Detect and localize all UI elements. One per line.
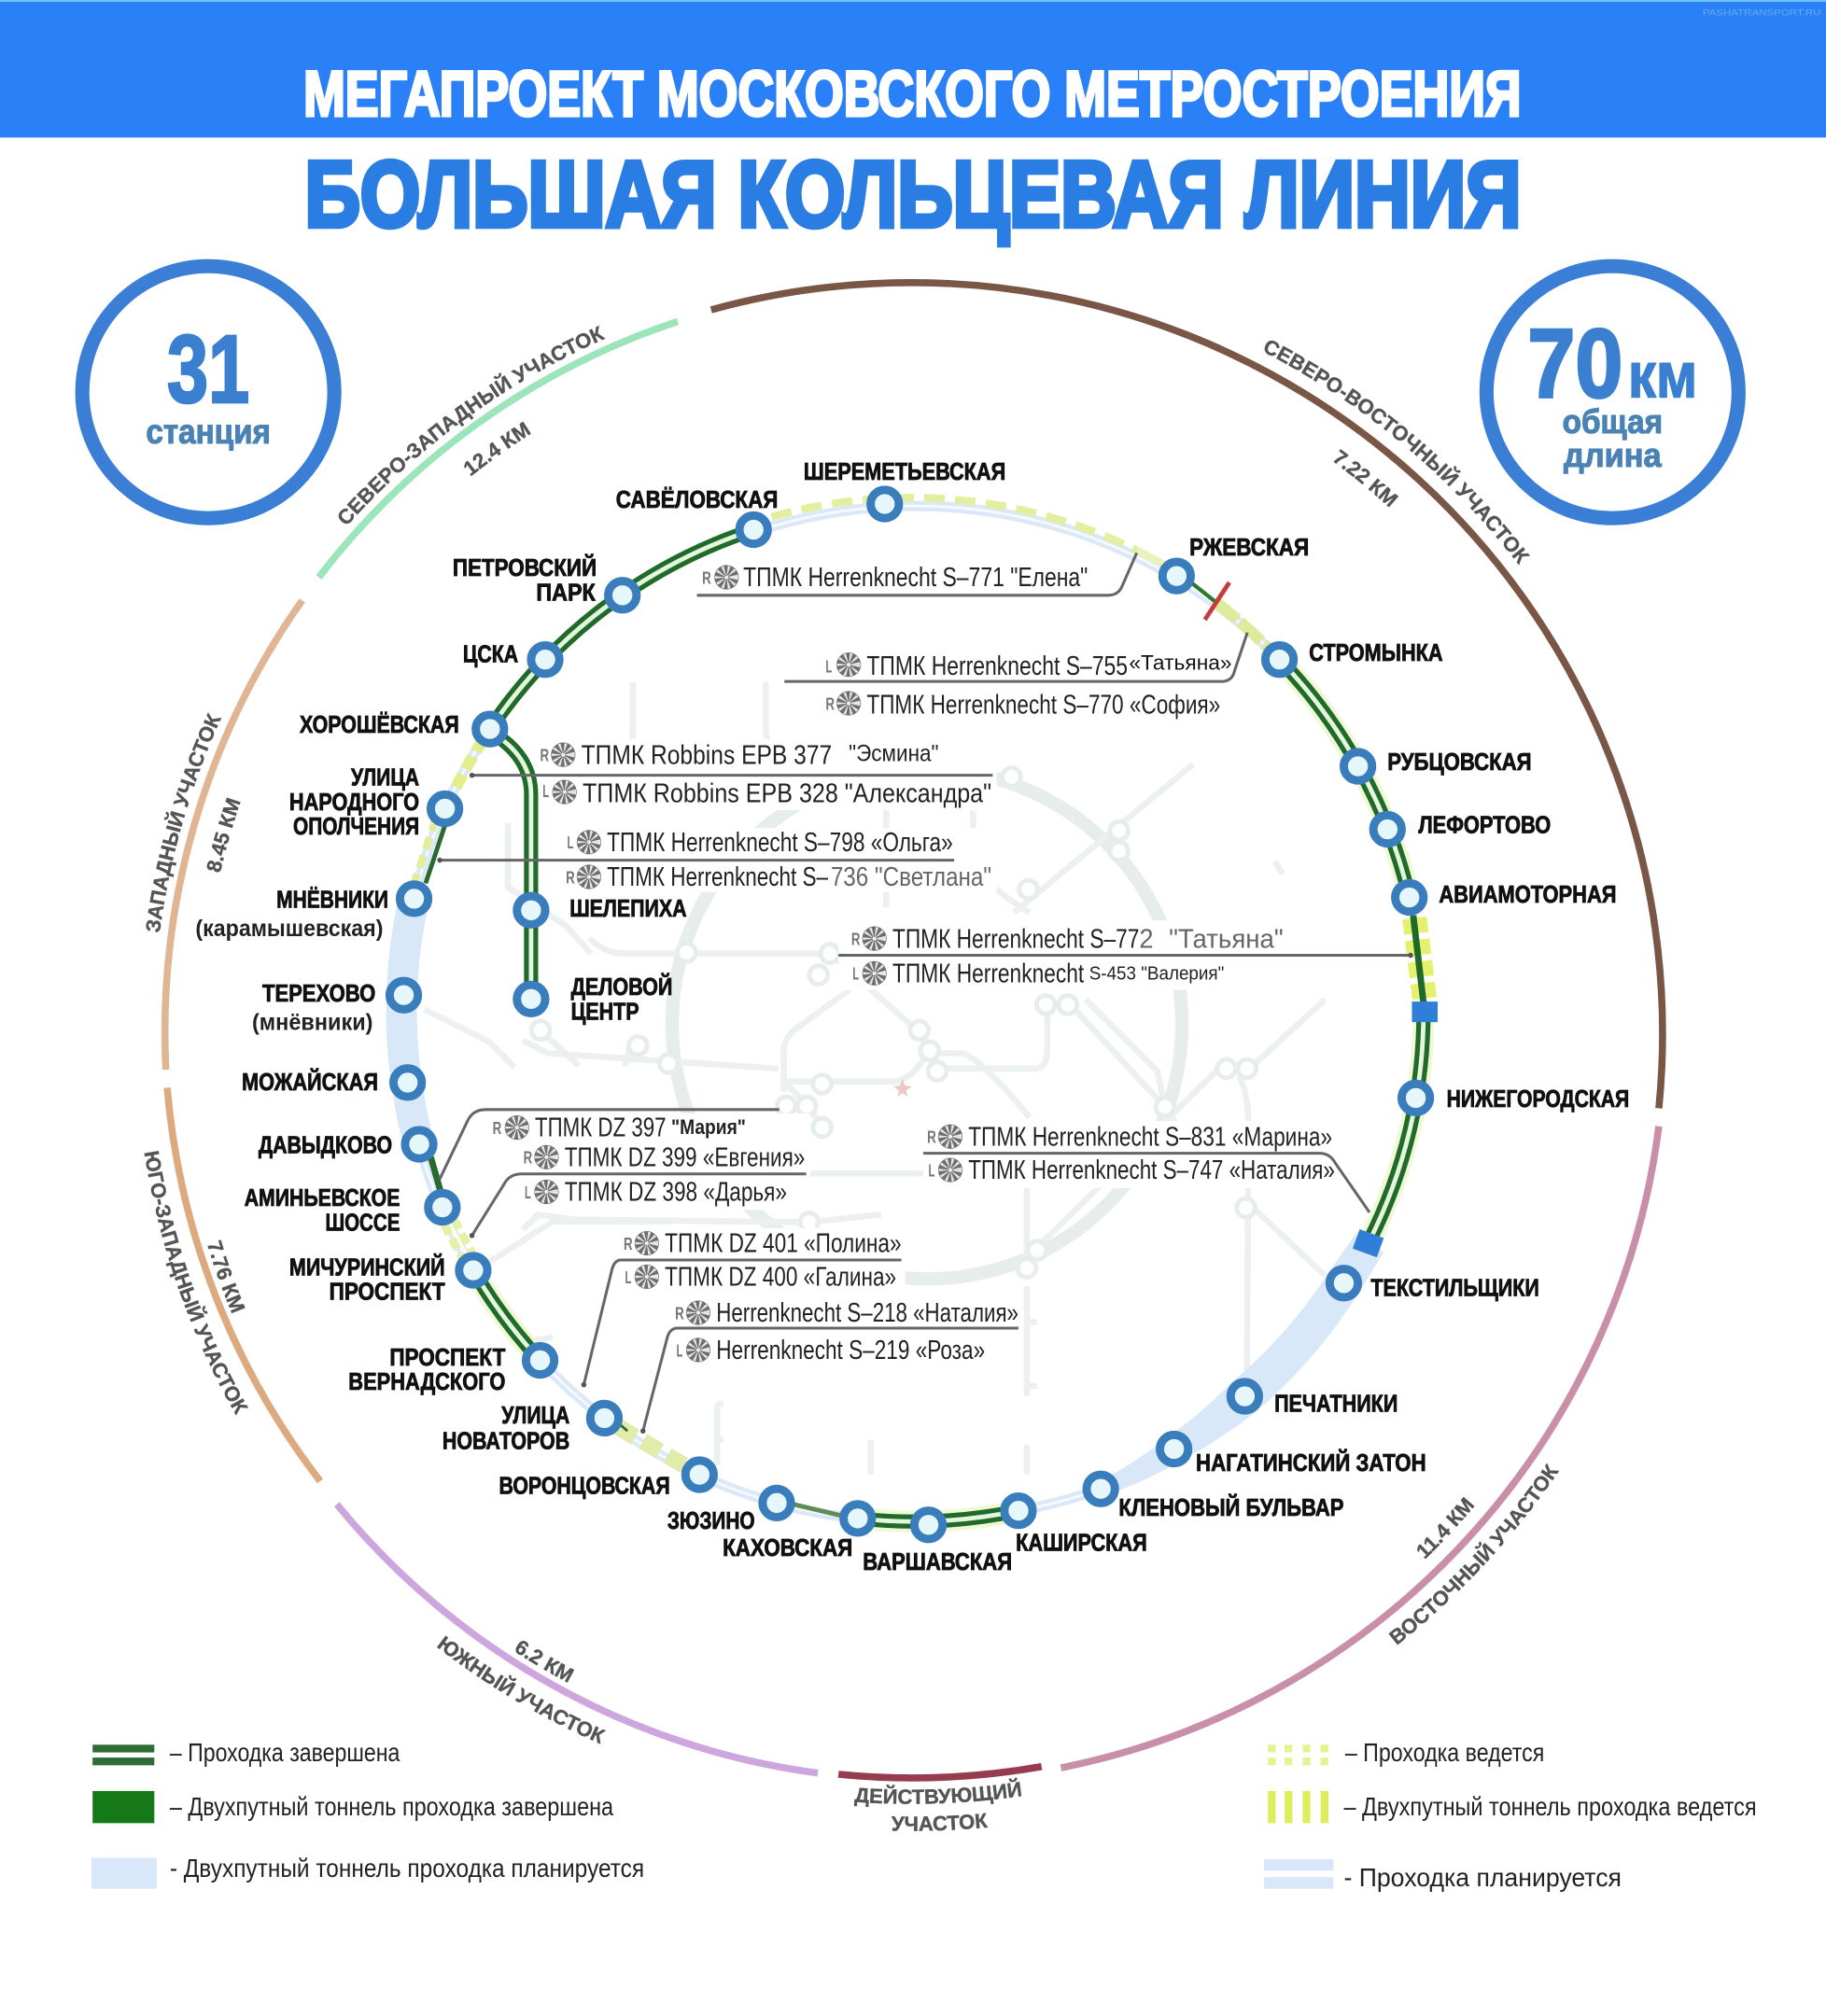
legend swatch: double-track completed xyxy=(92,1791,154,1823)
legend swatch: double-track in progress xyxy=(1268,1791,1328,1823)
arc: north-east section xyxy=(711,283,1663,1108)
station labels: ДАВЫДКОВО xyxy=(259,1133,392,1159)
callout: DZ 399 Евгения and DZ 398 Дарья: R xyxy=(524,1148,533,1168)
station labels: НИЖЕГОРОДСКАЯ xyxy=(1447,1086,1629,1113)
callout: DZ 401 Полина and DZ 400 Галина: L xyxy=(625,1267,631,1287)
callout: DZ 399 Евгения and DZ 398 Дарья: ТПМК DZ 399 «Евгения» xyxy=(565,1142,805,1172)
station labels: РЖЕВСКАЯ xyxy=(1189,535,1309,561)
station labels: ПРОСПЕКТ xyxy=(330,1280,445,1306)
station labels: ЦСКА xyxy=(463,641,518,667)
badge: 70 km total length: км xyxy=(1628,340,1697,412)
station labels: ШЕЛЕПИХА xyxy=(569,896,687,922)
callout: S-831 Марина and S-747 Наталия: R xyxy=(927,1127,936,1147)
callout: S-771 Елена: ТПМК Herrenknecht S–771 "Елена" xyxy=(743,563,1088,593)
callout: DZ 401 Полина and DZ 400 Галина: ТПМК DZ 400 «Галина» xyxy=(665,1263,896,1293)
callout: S-772 Татьяна and S-453 Валерия: L xyxy=(852,964,859,984)
station labels: ТЕКСТИЛЬЩИКИ xyxy=(1370,1276,1539,1302)
callout: DZ 401 Полина and DZ 400 Галина: ТПМК DZ 401 «Полина» xyxy=(665,1229,902,1259)
legend text: tunnelling in progress: – Проходка ведется xyxy=(1345,1738,1544,1767)
faint background metro map xyxy=(425,682,1326,1475)
station labels: ПАРК xyxy=(536,580,596,606)
callout: DZ 397 Мария: ТПМК DZ 397 xyxy=(535,1113,667,1143)
stations xyxy=(389,490,1430,1539)
label: east length: 11.4 КМ xyxy=(1417,1497,1475,1559)
callout: S-831 Марина and S-747 Наталия: L xyxy=(929,1160,934,1180)
label: east section: ВОСТОЧНЫЙ УЧАСТОК xyxy=(1388,1463,1559,1645)
label: operating section: ДЕЙСТВУЮЩИЙ xyxy=(853,1777,1021,1807)
station labels: МИЧУРИНСКИЙ xyxy=(289,1253,445,1281)
arc: east section xyxy=(1060,1127,1659,1768)
label: north-west section: СЕВЕРО-ЗАПАДНЫЙ УЧАСТОК xyxy=(338,325,606,525)
badge: 31 stations xyxy=(82,266,334,518)
station labels: ДЕЛОВОЙ xyxy=(571,973,672,1001)
legend text: tunnelling completed: – Проходка завершена xyxy=(170,1738,400,1767)
callout: S-831 Марина and S-747 Наталия: ТПМК Herrenknecht S–831 «Марина» xyxy=(968,1122,1332,1152)
watermark: PASHATRANSPORT.RU xyxy=(1703,8,1821,19)
subtitle: БОЛЬШАЯ КОЛЬЦЕВАЯ ЛИНИЯ xyxy=(304,142,1522,246)
label: north-east length: 7.22 КМ xyxy=(1333,449,1398,508)
callout: DZ 399 Евгения and DZ 398 Дарья: ТПМК DZ 398 «Дарья» xyxy=(565,1178,787,1208)
callout: S-755 Татьяна and S-770 София: L xyxy=(825,656,832,676)
callout: S-798 Ольга and S-736 Светлана xyxy=(437,828,991,892)
callout: S-772 Татьяна and S-453 Валерия: ТПМК Herrenknecht S–77 xyxy=(892,924,1139,954)
callout: S-755 Татьяна and S-770 София: ТПМК Herrenknecht S–755 xyxy=(866,651,1128,681)
callout: S-218 Наталия and S-219 Роза: Herrenknecht S–219 «Роза» xyxy=(716,1336,985,1365)
badge: 70 km total length: 70 xyxy=(1527,310,1622,419)
station labels: ВАРШАВСКАЯ xyxy=(863,1549,1012,1575)
label: west section: ЗАПАДНЫЙ УЧАСТОК xyxy=(146,712,222,933)
callout: Robbins EPB 377 and 328: "Эсмина" xyxy=(849,742,939,767)
station labels: НАГАТИНСКИЙ ЗАТОН xyxy=(1196,1449,1426,1477)
callout: S-772 Татьяна and S-453 Валерия: "Татьяна" xyxy=(1169,924,1284,954)
icon: blue shaft square 2 xyxy=(1353,1229,1384,1257)
main title: МЕГАПРОЕКТ МОСКОВСКОГО МЕТРОСТРОЕНИЯ xyxy=(303,58,1522,130)
header band xyxy=(0,0,1826,137)
label: south-west section: ЮГО-ЗАПАДНЫЙ УЧАСТОК xyxy=(144,1151,248,1416)
label: south-west length: 7.76 КМ xyxy=(207,1239,246,1314)
callout: DZ 401 Полина and DZ 400 Галина xyxy=(582,1229,902,1387)
line: tunnelling in progress sections xyxy=(413,497,1425,1468)
callout: S-798 Ольга and S-736 Светлана: ТПМК Herrenknecht S– xyxy=(607,862,829,892)
label: operating section line 2: УЧАСТОК xyxy=(891,1813,988,1831)
station labels: САВЁЛОВСКАЯ xyxy=(616,487,778,513)
callout: S-218 Наталия and S-219 Роза: L xyxy=(677,1340,682,1360)
line: planned tunnelling sections (thin double) xyxy=(414,506,1280,1519)
station labels: ШОССЕ xyxy=(325,1210,400,1236)
station labels: КАШИРСКАЯ xyxy=(1016,1530,1147,1556)
callout: S-772 Татьяна and S-453 Валерия: 2 xyxy=(1139,924,1154,954)
callout: S-218 Наталия and S-219 Роза xyxy=(640,1298,1018,1434)
outer ring of sections xyxy=(165,283,1663,1778)
station labels: МНЁВНИКИ xyxy=(276,888,388,914)
label: west length: 8.45 КМ xyxy=(207,797,241,872)
station labels: ВОРОНЦОВСКАЯ xyxy=(499,1474,670,1500)
callout: S-755 Татьяна and S-770 София xyxy=(784,633,1247,721)
callout: S-831 Марина and S-747 Наталия: ТПМК Herrenknecht S–747 «Наталия» xyxy=(968,1155,1335,1185)
station labels: ЛЕФОРТОВО xyxy=(1418,813,1551,839)
station labels: РУБЦОВСКАЯ xyxy=(1387,749,1532,776)
station labels: АВИАМОТОРНАЯ xyxy=(1439,882,1616,908)
callout: S-798 Ольга and S-736 Светлана: L xyxy=(567,833,573,852)
station labels: ОПОЛЧЕНИЯ xyxy=(293,814,419,840)
callout: S-218 Наталия and S-219 Роза: R xyxy=(675,1303,684,1323)
callout: S-771 Елена xyxy=(697,553,1137,595)
station labels: КАХОВСКАЯ xyxy=(723,1535,852,1561)
callout: DZ 401 Полина and DZ 400 Галина: R xyxy=(624,1234,633,1253)
arc: west section xyxy=(165,600,302,1070)
badge: 70 km total length xyxy=(1486,266,1738,518)
badge: 70 km total length: общая xyxy=(1563,403,1663,441)
callout: S-772 Татьяна and S-453 Валерия: ТПМК Herrenknecht xyxy=(892,959,1084,988)
legend swatch: tunnelling completed xyxy=(92,1744,154,1765)
station labels: ВЕРНАДСКОГО xyxy=(348,1369,505,1395)
section labels xyxy=(91,325,1559,1874)
legend text: double-track completed: – Двухпутный тоннель проходка завершена xyxy=(170,1792,614,1821)
station labels: УЛИЦА xyxy=(351,765,419,791)
station labels: ЗЮЗИНО xyxy=(667,1508,755,1534)
station labels: СТРОМЫНКА xyxy=(1309,640,1443,666)
legend: right column xyxy=(1264,1738,1757,1892)
station labels: ТЕРЕХОВО xyxy=(262,981,375,1007)
station labels: НОВАТОРОВ xyxy=(442,1428,569,1455)
legend: left column xyxy=(91,1738,644,1889)
callout: S-798 Ольга and S-736 Светлана: ТПМК Herrenknecht S–798 «Ольга» xyxy=(607,828,953,858)
callout: DZ 397 Мария: "Мария" xyxy=(671,1115,746,1139)
callout: Robbins EPB 377 and 328: R xyxy=(541,746,550,765)
callout: DZ 397 Мария xyxy=(440,1110,780,1179)
station labels: КЛЕНОВЫЙ БУЛЬВАР xyxy=(1118,1493,1343,1521)
station labels: АМИНЬЕВСКОЕ xyxy=(245,1185,400,1211)
station labels: (мнёвники) xyxy=(252,1010,372,1035)
badge: 31 stations: 31 xyxy=(167,315,249,423)
legend swatch: tunnelling planned xyxy=(1264,1859,1333,1889)
badge: 70 km total length: длина xyxy=(1564,437,1663,474)
station labels: ХОРОШЁВСКАЯ xyxy=(300,712,459,738)
callout: Robbins EPB 377 and 328 xyxy=(470,740,992,809)
icon: red barrier xyxy=(1205,582,1229,620)
arc: operating section xyxy=(838,1767,1042,1778)
callout: S-772 Татьяна and S-453 Валерия xyxy=(838,924,1413,988)
station labels: (карамышевская) xyxy=(195,917,383,942)
label: south length: 6.2 КМ xyxy=(515,1641,575,1683)
legend swatch: tunnelling in progress xyxy=(1268,1744,1328,1765)
callout: S-798 Ольга and S-736 Светлана: 736 "Светлана" xyxy=(831,862,991,892)
callout: S-771 Елена: R xyxy=(702,567,711,587)
legend text: double-track in progress: – Двухпутный тоннель проходка ведется xyxy=(1343,1792,1757,1821)
callout: S-831 Марина and S-747 Наталия xyxy=(923,1122,1370,1212)
callout: Robbins EPB 377 and 328: ТПМК Robbins EPB 328 "Александра" xyxy=(583,779,991,809)
station labels: ПЕТРОВСКИЙ xyxy=(453,553,597,581)
arc: north-west section xyxy=(319,321,678,578)
callout: S-772 Татьяна and S-453 Валерия: R xyxy=(851,929,861,949)
callout: Robbins EPB 377 and 328: L xyxy=(542,781,549,801)
legend text: tunnelling planned: - Проходка планируется xyxy=(1343,1863,1622,1892)
label: south section: ЮЖНЫЙ УЧАСТОК xyxy=(437,1635,607,1744)
label: north-west length: 12.4 КМ xyxy=(464,422,531,476)
badge: 31 stations: станция xyxy=(146,412,271,451)
line: planned double-track tunnel sections (wide) xyxy=(401,899,1384,1496)
icon: blue shaft square xyxy=(1412,1001,1438,1022)
station labels: МОЖАЙСКАЯ xyxy=(242,1068,378,1096)
callout: Robbins EPB 377 and 328: ТПМК Robbins EPB 377 xyxy=(582,740,832,770)
callout: S-218 Наталия and S-219 Роза: Herrenknecht S–218 «Наталия» xyxy=(716,1298,1018,1328)
station labels: НАРОДНОГО xyxy=(289,790,419,816)
callout: DZ 399 Евгения and DZ 398 Дарья: L xyxy=(525,1183,531,1202)
arc: south section xyxy=(337,1505,818,1773)
callout: S-798 Ольга and S-736 Светлана: R xyxy=(566,867,575,887)
callout: DZ 399 Евгения and DZ 398 Дарья xyxy=(470,1142,807,1239)
label: north-east section: СЕВЕРО-ВОСТОЧНЫЙ УЧАСТОК xyxy=(1264,340,1530,566)
callout: S-755 Татьяна and S-770 София: «Татьяна» xyxy=(1129,651,1232,675)
line: completed tunnels xyxy=(426,530,1424,1521)
legend text: double-track planned: - Двухпутный тоннель проходка планируется xyxy=(170,1854,644,1883)
legend swatch: double-track planned xyxy=(91,1858,157,1889)
station labels: ШЕРЕМЕТЬЕВСКАЯ xyxy=(804,459,1005,485)
callout: DZ 397 Мария: R xyxy=(493,1118,502,1138)
callout: S-772 Татьяна and S-453 Валерия: S-453 "Валерия" xyxy=(1089,964,1224,985)
station labels: ЦЕНТР xyxy=(571,999,639,1025)
station labels: УЛИЦА xyxy=(501,1403,569,1429)
callout: S-755 Татьяна and S-770 София: R xyxy=(825,693,835,713)
arc: south-west section xyxy=(167,1087,320,1481)
callout: S-755 Татьяна and S-770 София: ТПМК Herrenknecht S–770 «София» xyxy=(866,691,1220,721)
station labels: ПЕЧАТНИКИ xyxy=(1274,1392,1398,1418)
station labels xyxy=(195,459,1629,1575)
station labels: ПРОСПЕКТ xyxy=(389,1345,506,1371)
white panels behind callouts xyxy=(488,739,1341,1366)
